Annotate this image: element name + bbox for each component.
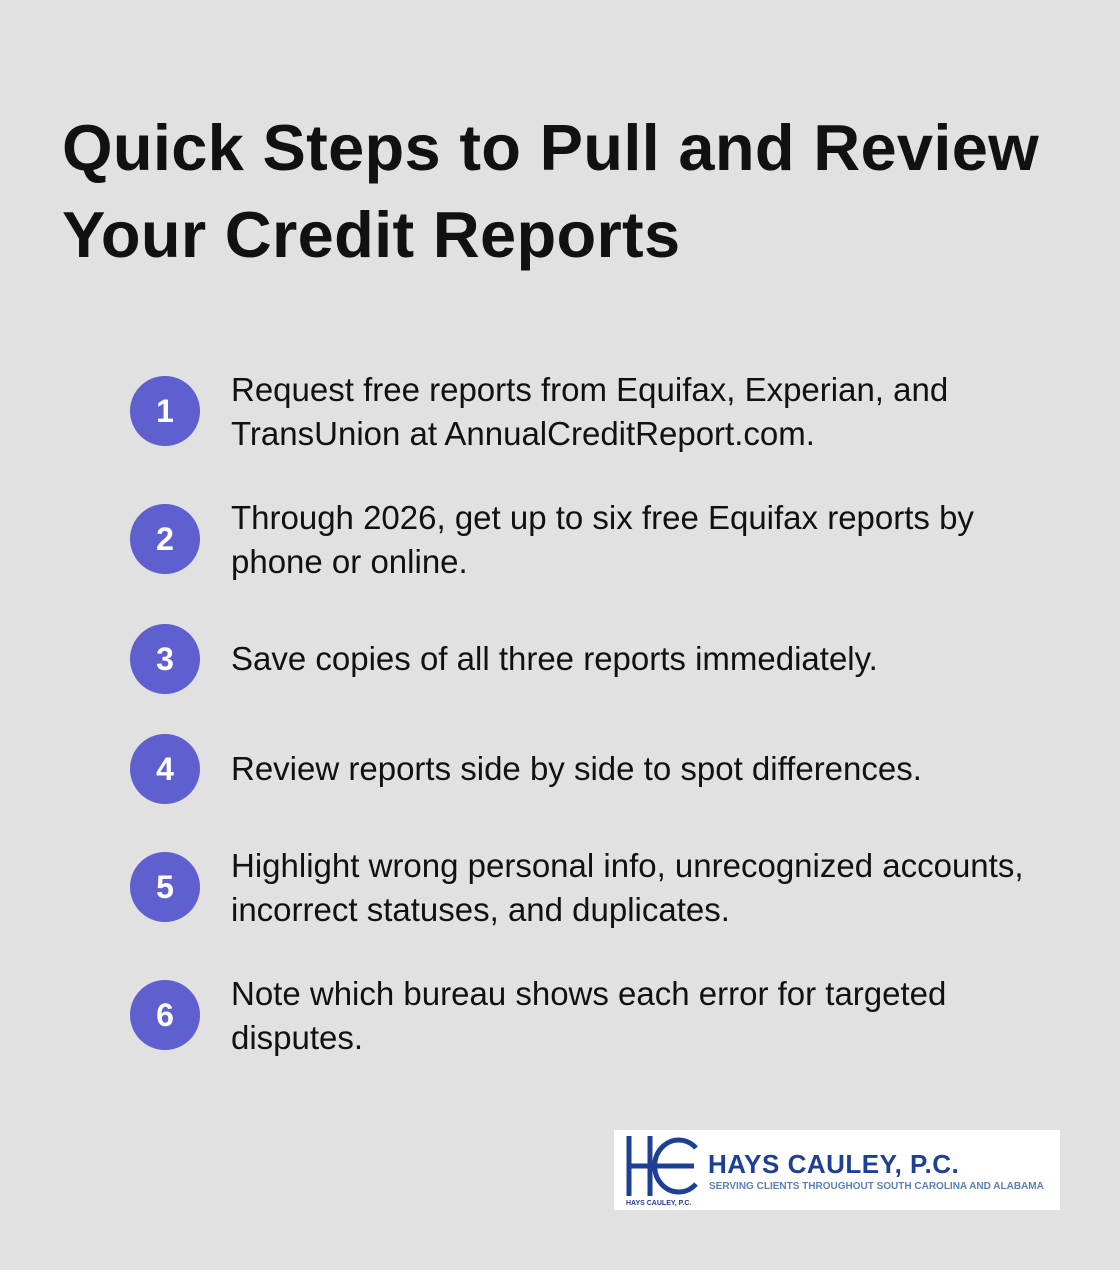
title: Quick Steps to Pull and Review: [62, 111, 1039, 184]
step 6: Note which bureau shows each error for targeted disputes.: [231, 975, 946, 1056]
step 6: 6: [156, 997, 174, 1033]
step 4: Review reports side by side to spot differences.: [231, 750, 922, 787]
step 3: [130, 624, 878, 694]
logo: SERVING CLIENTS THROUGHOUT SOUTH CAROLINA AND ALABAMA: [709, 1181, 1044, 1192]
step 5: 5: [156, 869, 174, 905]
logo: [614, 1130, 1060, 1210]
step 1: 1: [156, 393, 174, 429]
title: [62, 111, 1039, 271]
step 3: 3: [156, 641, 174, 677]
logo: HAYS CAULEY, P.C.: [708, 1149, 959, 1179]
step 4: 4: [156, 751, 174, 787]
step 4: [130, 734, 922, 804]
step 2: 2: [156, 521, 174, 557]
logo: HAYS CAULEY, P.C.: [626, 1200, 691, 1207]
step 5: Highlight wrong personal info, unrecognized accounts, incorrect statuses, and duplicates.: [231, 847, 1023, 928]
step 1: Request free reports from Equifax, Experian, and TransUnion at AnnualCreditReport.com.: [231, 371, 948, 452]
step 2: Through 2026, get up to six free Equifax reports by phone or online.: [231, 499, 974, 580]
icon: HC monogram: [626, 1136, 698, 1196]
title: Your Credit Reports: [62, 198, 680, 271]
step 3: Save copies of all three reports immediately.: [231, 640, 878, 677]
